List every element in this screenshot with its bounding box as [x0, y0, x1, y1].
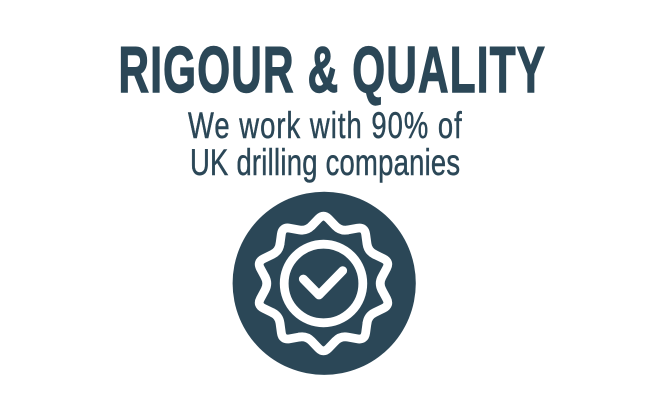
subtitle: [188, 105, 463, 183]
subtitle: We work with 90% of: [188, 105, 463, 146]
icon: quality badge with check mark: [233, 192, 416, 375]
title: RIGOUR & QUALITY: [118, 33, 545, 106]
subtitle: UK drilling companies: [190, 142, 460, 183]
